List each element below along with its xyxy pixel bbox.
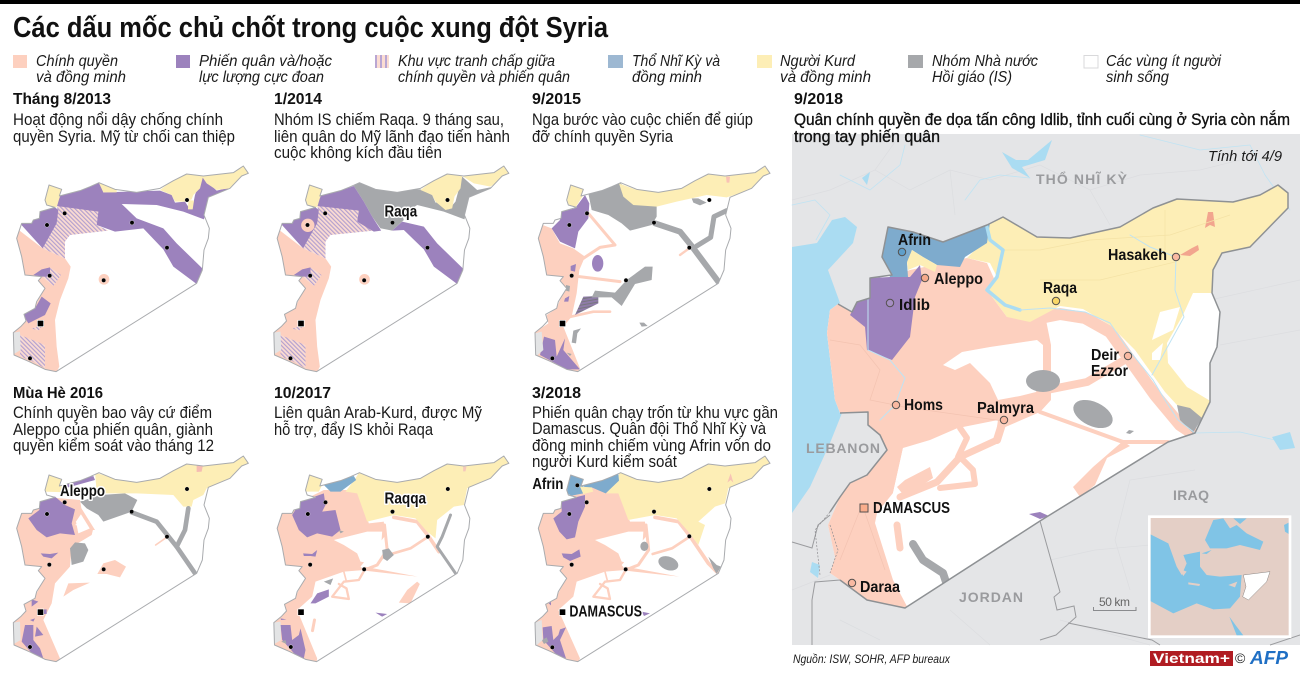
- legend item: Turkey: đồng minh: [632, 69, 702, 86]
- heading: Tháng 8/2013: [13, 91, 111, 108]
- map: [267, 165, 510, 373]
- panel: Summer 2016: [7, 385, 250, 663]
- logos: [1150, 648, 1289, 668]
- city labels: DAMASCUS: [873, 500, 950, 517]
- text block: Damascus. Quân đội Thổ Nhĩ Kỳ và: [532, 420, 767, 438]
- legend item: sparsely populated: sinh sống: [1106, 69, 1169, 86]
- map: [528, 455, 772, 663]
- logo: AFP: AFP: [1249, 648, 1289, 668]
- heading: 9/2015: [532, 91, 581, 108]
- legend item: government: [13, 53, 126, 86]
- text block: đỡ chính quyền Syria: [532, 128, 674, 146]
- text block: quyền Syria. Mỹ từ chối can thiệp: [13, 128, 235, 146]
- panel: January 2014: [267, 91, 510, 373]
- source note: Nguồn: ISW, SOHR, AFP bureaux: [793, 652, 951, 666]
- locator inset map: [1148, 517, 1290, 637]
- legend item: Kurds: [757, 53, 871, 86]
- body text over map: [794, 110, 1290, 146]
- legend item: rebels: [176, 53, 332, 86]
- legend item: Kurds: Người Kurd: [780, 53, 856, 70]
- scale bar: [1094, 595, 1136, 610]
- country labels: JORDAN: [959, 589, 1024, 605]
- city labels: Raqa: [1043, 280, 1077, 297]
- text block: [274, 404, 483, 439]
- map: [7, 455, 250, 663]
- legend item: government: và đồng minh: [36, 69, 126, 86]
- map: [7, 165, 250, 373]
- heading: Mùa Hè 2016: [13, 385, 103, 402]
- text block: Liên quân Arab-Kurd, được Mỹ: [274, 404, 483, 422]
- text block: Phiến quân chạy trốn từ khu vực gần: [532, 404, 778, 422]
- text block: Nhóm IS chiếm Raqa. 9 tháng sau,: [274, 111, 504, 129]
- city labels: Palmyra: [977, 400, 1034, 417]
- scale bar: 50 km: [1099, 595, 1130, 609]
- text block: [532, 404, 778, 471]
- panel: March 2018: [528, 385, 778, 663]
- legend item: rebels: lực lượng cực đoan: [199, 69, 324, 86]
- city labels: Idlib: [899, 297, 930, 314]
- heading: 9/2018: [794, 91, 843, 108]
- text block: Hoạt động nổi dậy chống chính: [13, 111, 223, 129]
- city labels: Ezzor: [1091, 363, 1128, 380]
- map: [533, 165, 771, 373]
- legend: [13, 53, 1222, 86]
- city labels: Hasakeh: [1108, 247, 1167, 264]
- main map: [792, 134, 1300, 645]
- text block: Aleppo của phiến quân, giành: [13, 421, 213, 439]
- panel: September 2015: [532, 91, 771, 373]
- heading: 3/2018: [532, 385, 581, 402]
- legend item: government: Chính quyền: [36, 53, 118, 70]
- city markers: [848, 248, 1180, 587]
- copyright: ©: [1235, 650, 1246, 666]
- city labels: Afrin: [898, 232, 931, 249]
- map label: DAMASCUS: [569, 604, 642, 621]
- legend item: sparsely populated: [1084, 53, 1222, 86]
- legend item: rebels: Phiến quân và/hoặc: [199, 53, 332, 70]
- text block: đồng minh chiếm vùng Afrin vốn do: [532, 437, 771, 455]
- legend item: Turkey: [608, 53, 720, 86]
- date note: Tính tới 4/9: [1208, 149, 1282, 165]
- country labels: IRAQ: [1173, 487, 1210, 503]
- legend item: Kurds: và đồng minh: [780, 69, 871, 86]
- text block: liên quân do Mỹ lãnh đạo tiến hành: [274, 128, 510, 146]
- text block: người Kurd kiểm soát: [532, 453, 677, 471]
- sea: [792, 217, 857, 513]
- city labels: [860, 232, 1167, 596]
- map label: Aleppo: [60, 483, 105, 500]
- legend item: Turkey: Thổ Nhĩ Kỳ và: [632, 53, 720, 70]
- text block: quyền kiểm soát vào tháng 12: [13, 437, 214, 455]
- heading: 1/2014: [274, 91, 322, 108]
- city labels: Daraa: [860, 579, 900, 596]
- text block: [13, 111, 235, 146]
- text block: [532, 111, 753, 146]
- country labels: THỔ NHĨ KỲ: [1036, 170, 1128, 187]
- city labels: Deir: [1091, 347, 1119, 364]
- text block: [13, 404, 214, 455]
- text block: Nga bước vào cuộc chiến để giúp: [532, 111, 753, 129]
- legend item: contested: chính quyền và phiến quân: [398, 69, 570, 86]
- text block: cuộc không kích đầu tiên: [274, 144, 442, 162]
- legend item: contested: Khu vực tranh chấp giữa: [398, 53, 555, 70]
- legend item: IS: Nhóm Nhà nước: [932, 53, 1038, 70]
- city labels: Aleppo: [934, 271, 983, 288]
- country labels: LEBANON: [806, 440, 881, 456]
- heading: 10/2017: [274, 385, 331, 402]
- legend item: IS: Hồi giáo (IS): [932, 69, 1012, 86]
- country labels: [806, 170, 1210, 605]
- panel: October 2017: [267, 385, 510, 663]
- title: Các dấu mốc chủ chốt trong cuộc xung đột Syria: [13, 12, 609, 44]
- text block: Chính quyền bao vây cứ điểm: [13, 404, 212, 422]
- panel: September 2018 main map: [792, 91, 1300, 645]
- legend item: IS: [908, 53, 1038, 86]
- map label: Raqqa: [384, 490, 427, 507]
- country fills: [827, 186, 1288, 608]
- legend item: contested: [375, 53, 570, 86]
- logo: Vietnam+: Vietnam+: [1153, 650, 1230, 666]
- city labels: Homs: [904, 397, 943, 414]
- legend item: sparsely populated: Các vùng ít người: [1106, 53, 1222, 70]
- panel: August 2013: [7, 91, 250, 373]
- text block: hỗ trợ, đẩy IS khỏi Raqa: [274, 420, 434, 439]
- map: [267, 455, 510, 663]
- border: [830, 185, 1288, 608]
- body text over map: trong tay phiến quân: [794, 128, 940, 146]
- map label: Afrin: [532, 476, 563, 493]
- map label: Raqa: [384, 204, 418, 221]
- text block: [274, 111, 510, 162]
